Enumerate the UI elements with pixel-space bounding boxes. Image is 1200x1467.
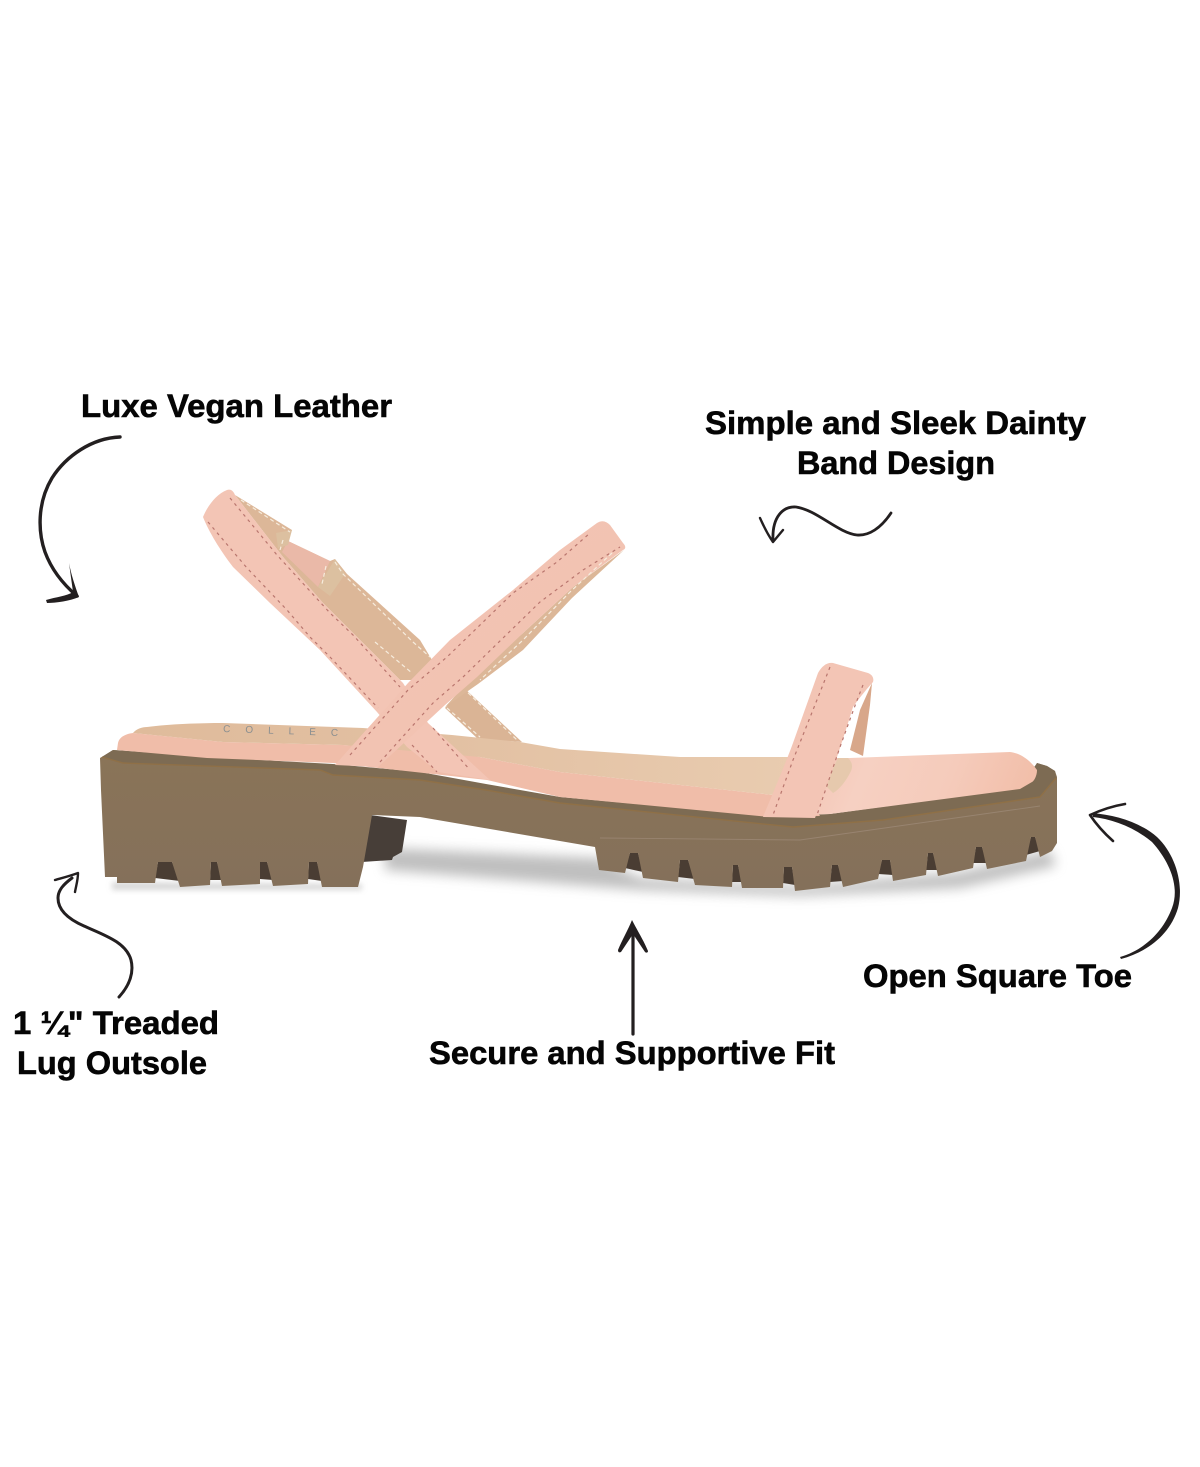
heel strap bbox=[203, 490, 490, 780]
tread dark gaps bbox=[155, 837, 1040, 885]
sole mould line bbox=[600, 806, 1040, 840]
toe band bbox=[763, 663, 873, 818]
label: Simple and Sleek Dainty Band Design: Simple and Sleek Dainty bbox=[705, 405, 1086, 441]
arrow: leather callout bbox=[40, 437, 120, 603]
label: Simple and Sleek Dainty Band Design bbox=[705, 405, 1086, 481]
front crossing strap bbox=[335, 521, 625, 767]
insole brand text: COLLEC bbox=[223, 724, 353, 740]
front strap lining bbox=[445, 550, 624, 707]
arrow: toe callout bbox=[1090, 804, 1180, 959]
heel and arch footbed bbox=[133, 723, 800, 796]
label: 1 1/4 inch Treaded Lug Outsole: Lug Outsole bbox=[17, 1045, 207, 1081]
label: Open Square Toe: Open Square Toe bbox=[863, 958, 1132, 994]
toe band lining bbox=[825, 683, 872, 793]
toe platform bbox=[780, 752, 1037, 816]
arrow: fit callout bbox=[618, 920, 648, 1034]
arrow: band callout bbox=[760, 507, 891, 542]
sandal product image bbox=[100, 490, 1057, 896]
pink rand around footbed bbox=[117, 733, 820, 817]
outsole bbox=[100, 750, 1057, 891]
ground shadow bbox=[112, 848, 1056, 896]
sole ledge bbox=[102, 750, 1056, 827]
heel strap lining and elastic bbox=[235, 495, 522, 742]
arrow: treaded sole callout bbox=[55, 873, 132, 997]
label: Secure and Supportive Fit: Secure and Supportive Fit bbox=[429, 1035, 835, 1071]
sole body with lugs bbox=[100, 750, 1057, 891]
heel cavity bbox=[362, 815, 407, 862]
label: 1 1/4 inch Treaded Lug Outsole: 1 ¼" Treaded bbox=[13, 1005, 219, 1041]
label: Simple and Sleek Dainty Band Design: Band Design bbox=[797, 445, 995, 481]
label: Luxe Vegan Leather: Luxe Vegan Leather bbox=[81, 388, 392, 424]
label: 1 1/4 inch Treaded Lug Outsole bbox=[13, 1005, 219, 1081]
sole ledge highlight bbox=[102, 757, 1056, 827]
